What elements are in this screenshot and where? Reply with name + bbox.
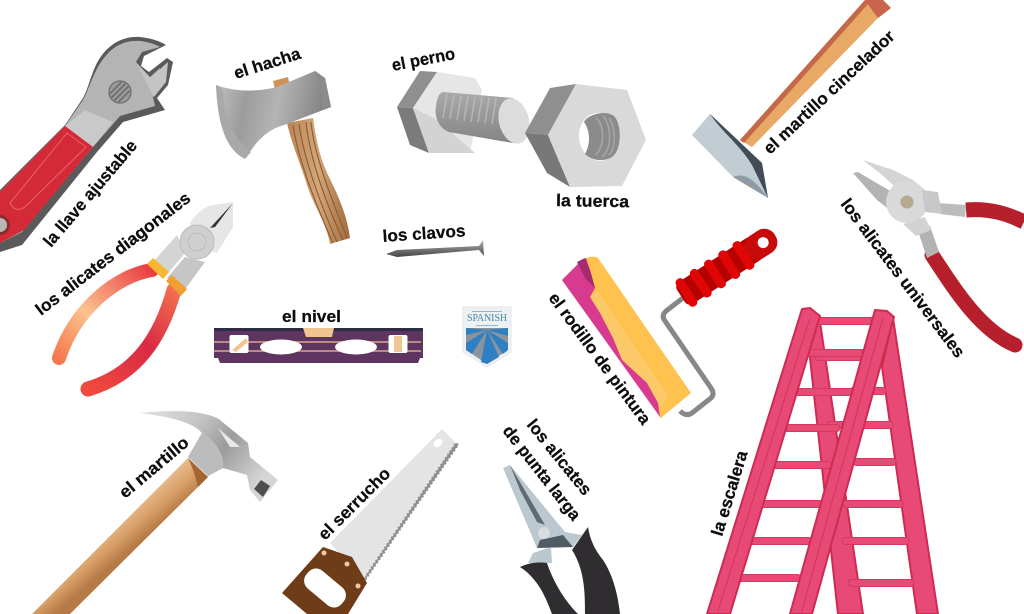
tool: handsaw: [282, 429, 458, 614]
label: el nivel: el nivel: [282, 307, 341, 326]
label: los alicates: los alicates: [523, 416, 596, 499]
label: el hacha: el hacha: [231, 44, 304, 83]
tool: cross-peen hammer: [692, 0, 891, 198]
tool: paint roller: [562, 222, 784, 418]
tool: nail: [386, 240, 484, 257]
tool: claw hammer: [32, 411, 278, 614]
back rails: [805, 312, 938, 614]
tool: lineman pliers: [853, 160, 1024, 345]
label: los alicates universales: los alicates universales: [837, 195, 969, 361]
label: la escalera: la escalera: [708, 448, 752, 538]
front rails: [707, 308, 894, 614]
label: los alicates diagonales: los alicates diagonales: [32, 188, 194, 319]
label: el serrucho: el serrucho: [314, 464, 394, 544]
logo: Spanish Academy shield: [463, 307, 511, 367]
roller handle: [672, 222, 784, 309]
back rungs: [812, 318, 914, 586]
tool: adjustable wrench: [0, 37, 173, 252]
tool: bolt: [397, 71, 534, 153]
label: el martillo cincelador: el martillo cincelador: [760, 26, 899, 158]
tool: diagonal cutters: [59, 202, 233, 389]
tool: spirit level: [214, 328, 423, 363]
label: la llave ajustable: la llave ajustable: [40, 136, 141, 251]
label: la tuerca: la tuerca: [556, 191, 630, 211]
logo wordmark: SPANISH: [467, 313, 507, 324]
label: de punta larga: de punta larga: [499, 422, 585, 525]
tool: nut: [525, 84, 646, 187]
wrench screw: [104, 76, 136, 108]
label: el martillo: el martillo: [115, 433, 193, 502]
tool: axe: [216, 71, 350, 244]
tool: stepladder: [707, 308, 938, 614]
front-left rungs: [733, 350, 866, 582]
label: el rodillo de pintura: el rodillo de pintura: [545, 289, 655, 429]
tool: needle-nose pliers: [503, 465, 620, 614]
label: los clavos: los clavos: [382, 221, 466, 246]
label: el perno: el perno: [390, 44, 457, 75]
